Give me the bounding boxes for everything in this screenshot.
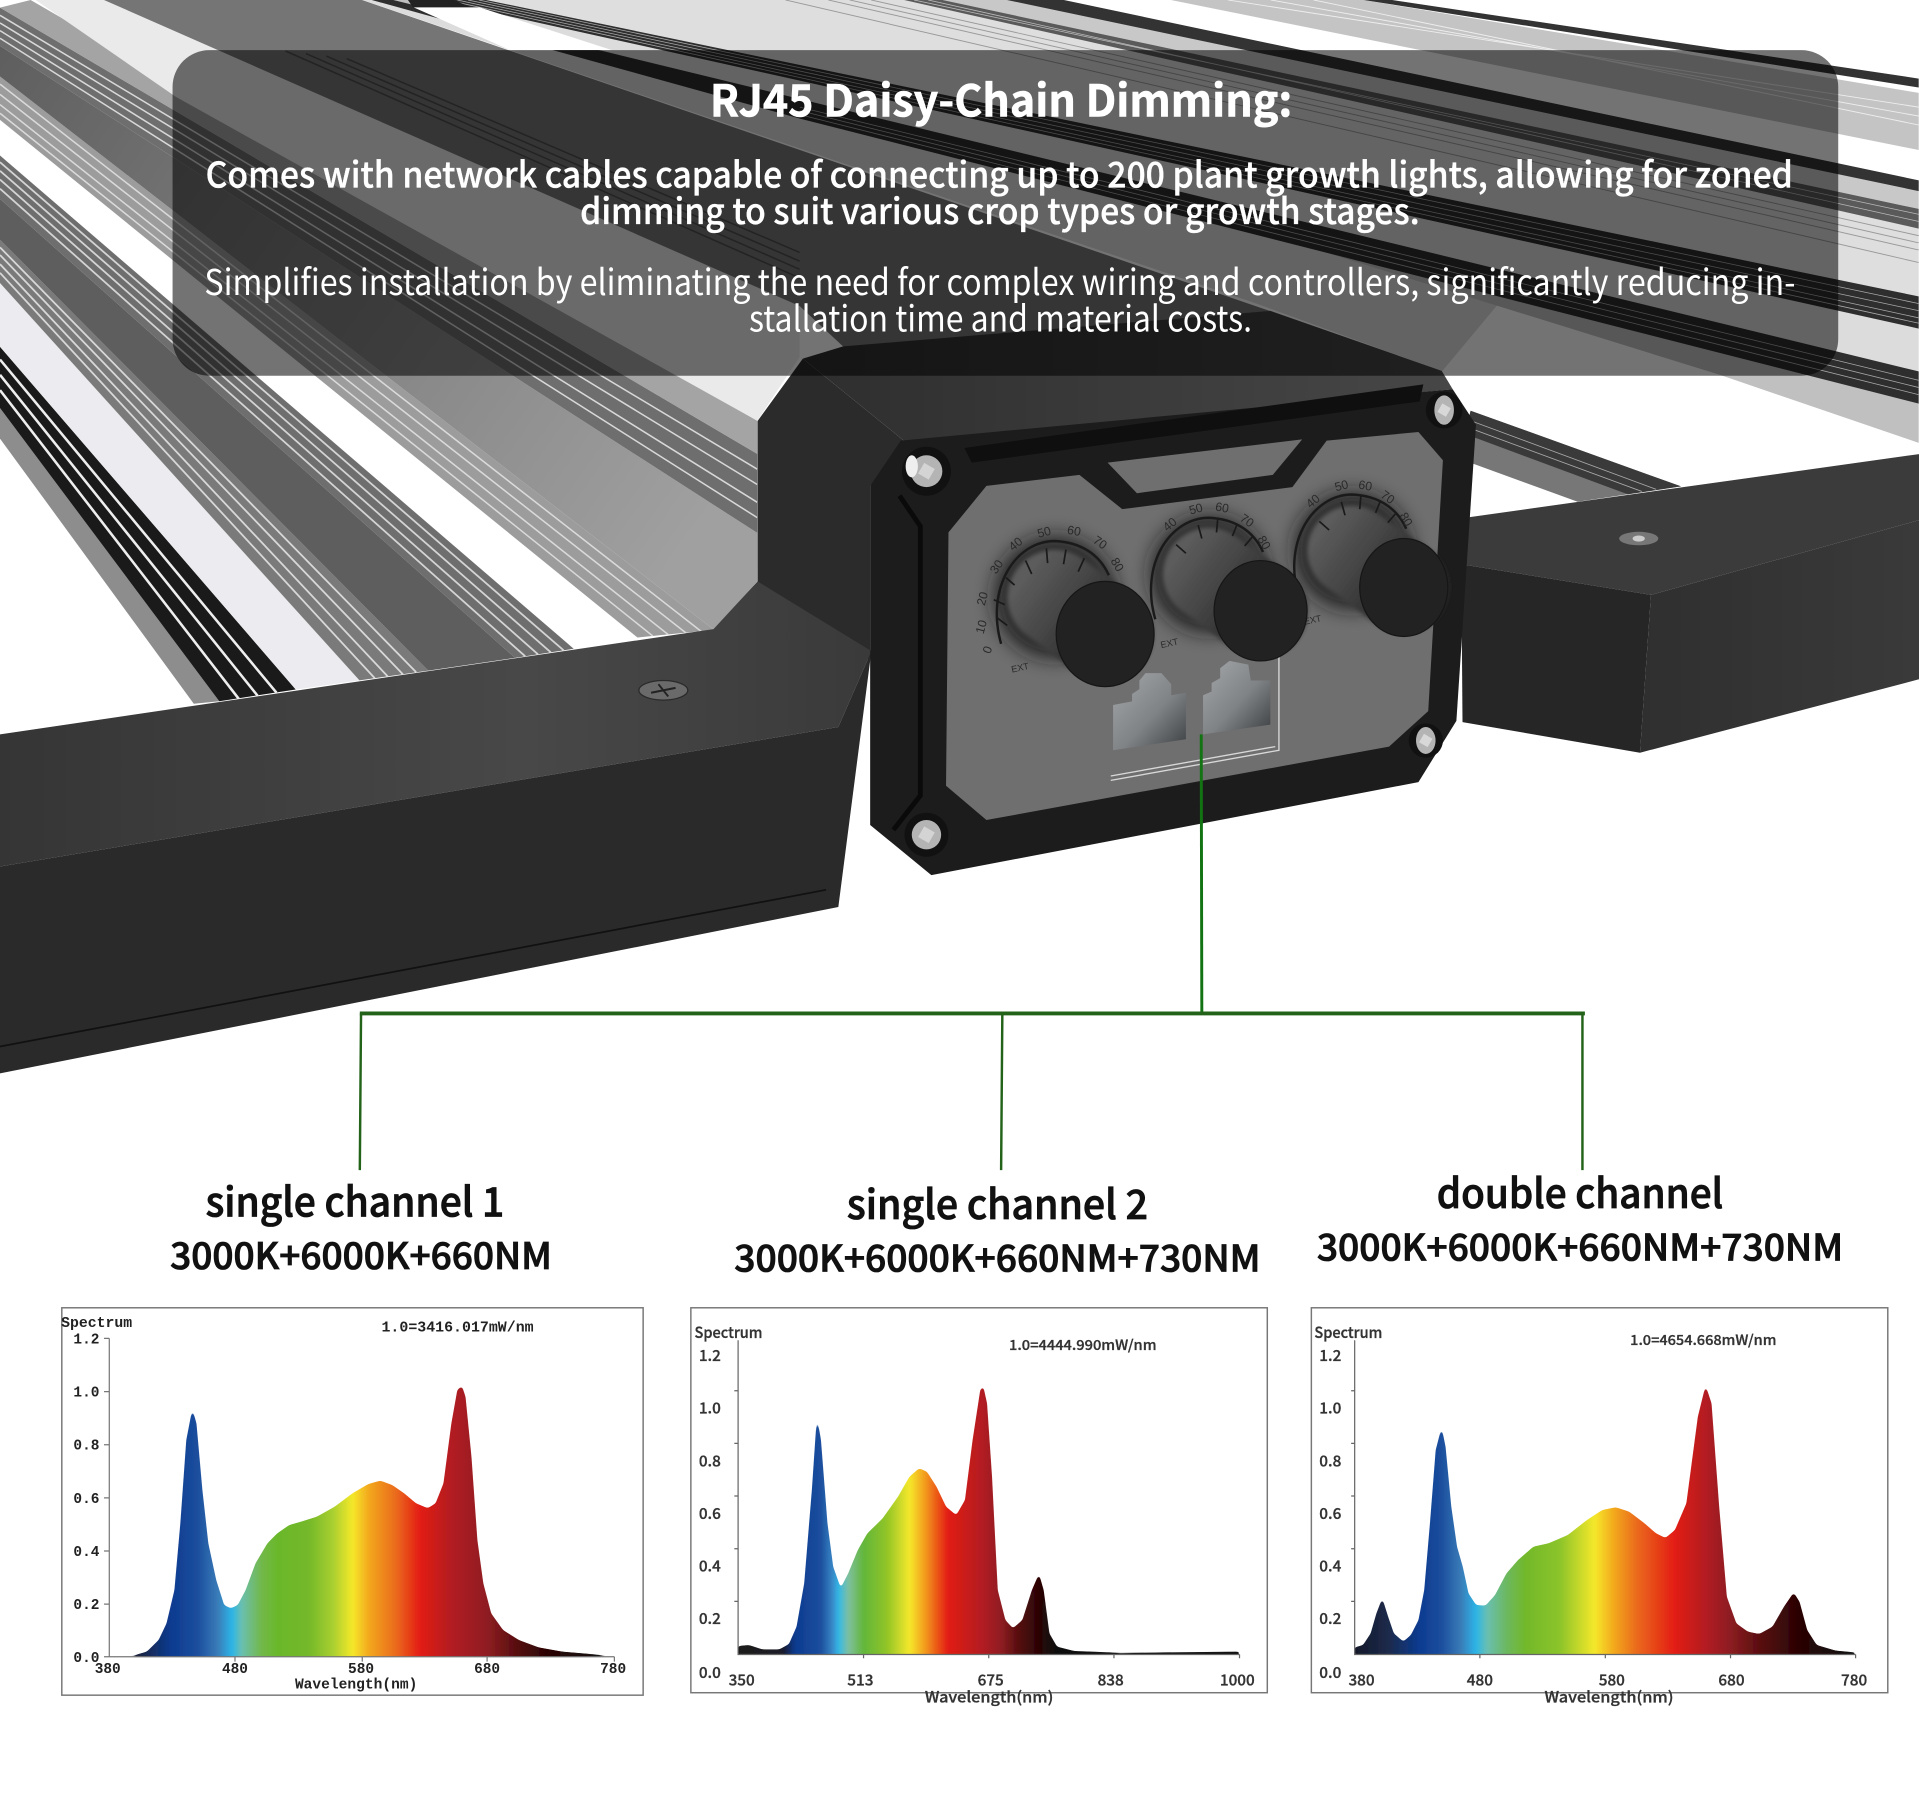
panel paragraph 1 (206, 147, 1793, 235)
chart 1 labels: 1.2 (73, 1332, 99, 1348)
chart 1 labels: 680 (474, 1662, 500, 1678)
knob 1 with dial (973, 523, 1154, 687)
right bar screw (1619, 532, 1658, 545)
chart 2 labels: Spectrum (695, 1321, 762, 1343)
chart 2 labels: Wavelength(nm) (925, 1686, 1053, 1708)
chart 1 labels: 780 (600, 1662, 626, 1678)
chart 3 labels: 0.6 (1319, 1502, 1342, 1524)
chart 3 axes (1351, 1340, 1856, 1658)
knob 2 with dial: EXT (1160, 636, 1180, 650)
knob 2 with dial: 60 (1214, 500, 1230, 516)
chart 1 labels: 380 (95, 1662, 121, 1678)
knob 1 with dial: 30 (987, 557, 1006, 576)
panel paragraph 1: dimming to suit various crop types or growth stages. (580, 184, 1420, 235)
right bar top face (1456, 454, 1919, 595)
chart 1 labels: 0.8 (73, 1439, 99, 1455)
chart 1 labels: Spectrum (61, 1316, 133, 1332)
knob 1 with dial: 60 (1066, 523, 1082, 539)
panel paragraph 2: Simplifies installation by eliminating the need for complex wiring and controllers, significantly reducing in- (204, 255, 1795, 306)
front frame (870, 389, 1476, 875)
chart 3 labels: Spectrum (1314, 1321, 1382, 1343)
control box (803, 311, 1476, 875)
grey faceplate (946, 432, 1443, 820)
knob 1 with dial: 0 (980, 644, 995, 655)
chart 1 labels: 0.0 (73, 1651, 99, 1667)
top white gap between rails (414, 7, 612, 50)
bar screw (639, 681, 688, 700)
double channel label (1317, 1161, 1843, 1272)
spectrum chart 2 (691, 1308, 1267, 1708)
chart 1 labels: 580 (348, 1662, 374, 1678)
knob 1 with dial: 40 (1006, 534, 1026, 554)
chart 2 labels: 0.6 (699, 1502, 721, 1524)
knob 1 with dial: EXT (1010, 661, 1030, 675)
double channel label: double channel (1437, 1161, 1723, 1220)
knob 3 with dial: 60 (1357, 478, 1373, 494)
channel 1 label: 3000K+6000K+660NM (170, 1226, 552, 1280)
chart 2 labels: 1000 (1220, 1668, 1255, 1690)
bar front face (0, 651, 871, 1073)
double channel label: 3000K+6000K+660NM+730NM (1317, 1218, 1843, 1272)
chart 1 labels: 0.2 (73, 1598, 99, 1614)
knob 3 with dial: 70 (1378, 488, 1397, 507)
chart 3 labels: 0.2 (1319, 1607, 1341, 1629)
knob 3 with dial: 40 (1303, 491, 1323, 511)
chart 1 labels: 0.6 (73, 1492, 99, 1508)
chart 1 labels: Wavelength(nm) (295, 1677, 417, 1693)
chart 2 curve (738, 1386, 1239, 1654)
chart 2 axes (734, 1340, 1240, 1658)
knob 3 with dial: 50 (1333, 477, 1350, 494)
chart 3 labels: 680 (1718, 1668, 1745, 1690)
chart 2 labels (695, 1321, 1255, 1708)
chart 2 labels: 350 (729, 1668, 755, 1690)
chart 3 labels: 0.0 (1319, 1661, 1341, 1683)
chart 2 labels: 0.2 (699, 1607, 721, 1629)
knob 1 with dial: 50 (1036, 524, 1053, 541)
chart 3 labels: 1.0 (1319, 1396, 1341, 1418)
knob 2 with dial: 50 (1188, 500, 1204, 517)
channel 2 label: single channel 2 (847, 1172, 1148, 1231)
knob 1 with dial: 20 (974, 590, 991, 607)
chart 2 labels: 1.2 (699, 1344, 721, 1366)
chart 3 labels: 0.8 (1319, 1449, 1341, 1471)
knob 3 with dial: EXT (1303, 613, 1323, 627)
spectrum chart 1 (61, 1308, 643, 1695)
chart 3 labels: 1.0=4654.668mW/nm (1630, 1330, 1776, 1350)
panel paragraph 2 (204, 255, 1795, 343)
chart 3 labels (1314, 1321, 1867, 1708)
green connector lines (360, 734, 1585, 1170)
chart 2 labels: 0.8 (699, 1449, 721, 1471)
chart 1 labels: 1.0=3416.017mW/nm (381, 1321, 534, 1337)
bar top face (0, 581, 871, 867)
channel 2 label (734, 1172, 1261, 1283)
channel 2 label: 3000K+6000K+660NM+730NM (734, 1229, 1261, 1283)
knob 2 with dial: 80 (1255, 533, 1274, 552)
chart 1 labels (61, 1316, 626, 1693)
knob 1 with dial: 70 (1091, 533, 1110, 552)
knob 1 with dial: 10 (973, 618, 990, 635)
chart 2 labels: 513 (847, 1668, 873, 1690)
box top face (803, 311, 1453, 443)
panel paragraph 2: stallation time and material costs. (749, 292, 1252, 343)
lower-left LED rails (0, 0, 1270, 704)
chart 3 labels: 380 (1348, 1668, 1375, 1690)
box side (758, 359, 907, 661)
chart 2 labels: 1.0=4444.990mW/nm (1009, 1335, 1157, 1355)
chart 2 labels: 0.0 (699, 1661, 721, 1683)
port 1 (1113, 673, 1186, 750)
knob 3 with dial (1294, 477, 1448, 636)
left connecting bar and box side (0, 359, 907, 1073)
chart 1 labels: 1.0 (73, 1386, 99, 1402)
chart 1 curve (109, 1386, 615, 1657)
translucent text panel (173, 50, 1838, 376)
panel paragraph 1: Comes with network cables capable of connecting up to 200 plant growth lights, allowing for zoned (206, 147, 1793, 198)
channel 1 label: single channel 1 (206, 1170, 504, 1229)
knob 2 with dial: 70 (1237, 511, 1257, 530)
knob 2 with dial (1150, 500, 1307, 661)
knob 2 with dial: 40 (1160, 515, 1180, 534)
chart 3 labels: 1.2 (1319, 1344, 1341, 1366)
chart 3 labels: 480 (1467, 1668, 1493, 1690)
chart 1 labels: 480 (222, 1662, 248, 1678)
chart 2 labels: 838 (1098, 1668, 1124, 1690)
chart 2 labels: 1.0 (699, 1396, 721, 1418)
chart 1 axes (104, 1338, 614, 1662)
chart 2 labels: 675 (978, 1668, 1004, 1690)
spectrum chart 3 (1311, 1308, 1888, 1708)
chart 2 labels: 0.4 (699, 1555, 721, 1577)
faceplate window (1108, 439, 1302, 493)
panel heading: RJ45 Daisy-Chain Dimming: (710, 65, 1292, 129)
chart 3 curve (1355, 1386, 1856, 1654)
port 2 (1203, 661, 1270, 734)
chart 3 labels: 780 (1841, 1668, 1867, 1690)
knob 1 with dial: 80 (1108, 555, 1127, 574)
RJ45 ports (1111, 654, 1279, 780)
chart 3 labels: 580 (1599, 1668, 1625, 1690)
corner bolts (902, 392, 1463, 857)
right bar side and front (1461, 564, 1651, 753)
chart 3 labels: Wavelength(nm) (1545, 1686, 1674, 1708)
chart 1 labels: 0.4 (73, 1545, 100, 1561)
right connecting bar (1456, 454, 1919, 753)
chart 3 labels: 0.4 (1319, 1555, 1342, 1577)
upper-right LED rails (363, 0, 1919, 502)
knob 3 with dial: 80 (1397, 510, 1416, 529)
channel 1 label (170, 1170, 552, 1280)
